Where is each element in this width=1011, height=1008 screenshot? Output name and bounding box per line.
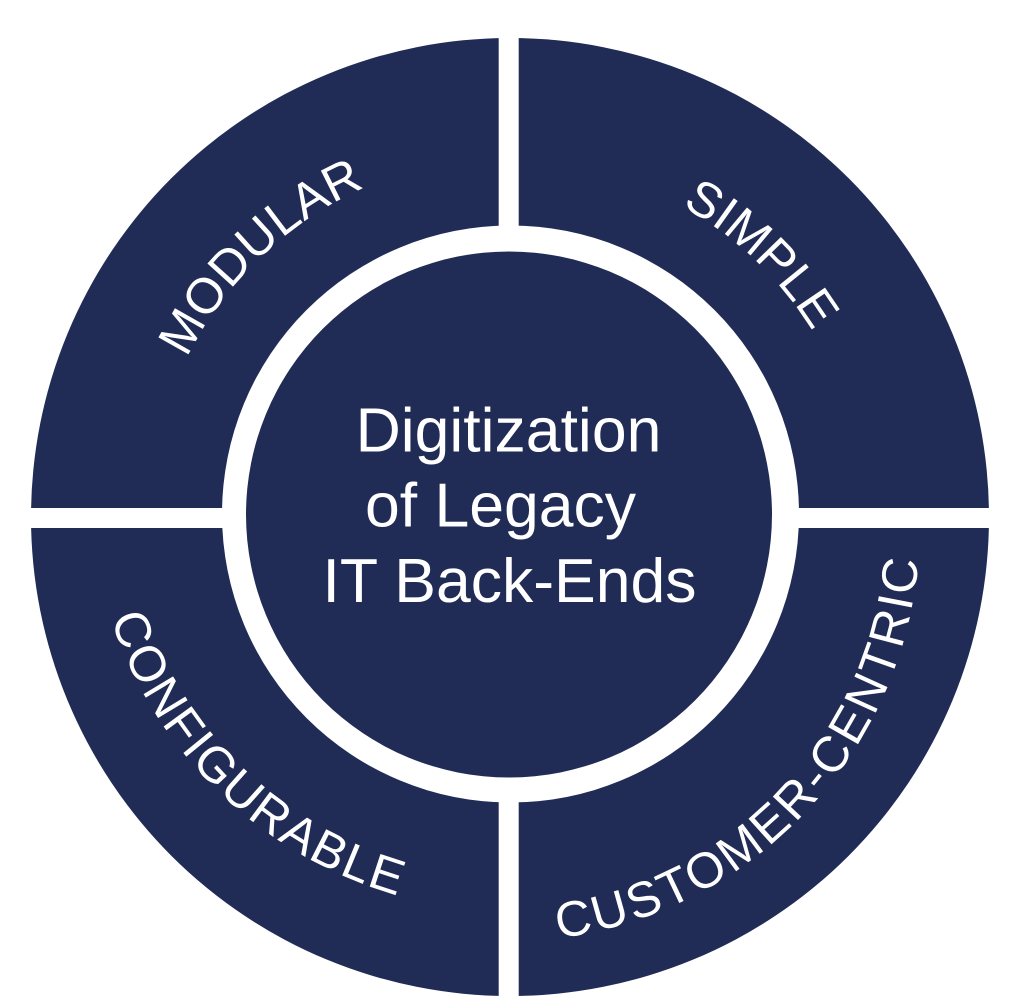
segment label: SIMPLE: SIMPLE [687,182,840,330]
segment label: CONFIGURABLE: CONFIGURABLE [115,613,406,896]
center circle [246,252,772,778]
center title [322,396,696,616]
center title: Digitization [356,396,661,466]
center title: of Legacy [365,470,637,540]
center title: IT Back-Ends [322,546,696,616]
segment label: MODULAR: MODULAR [158,162,363,354]
segment label: CUSTOMER-CENTRIC: CUSTOMER-CENTRIC [557,558,918,936]
